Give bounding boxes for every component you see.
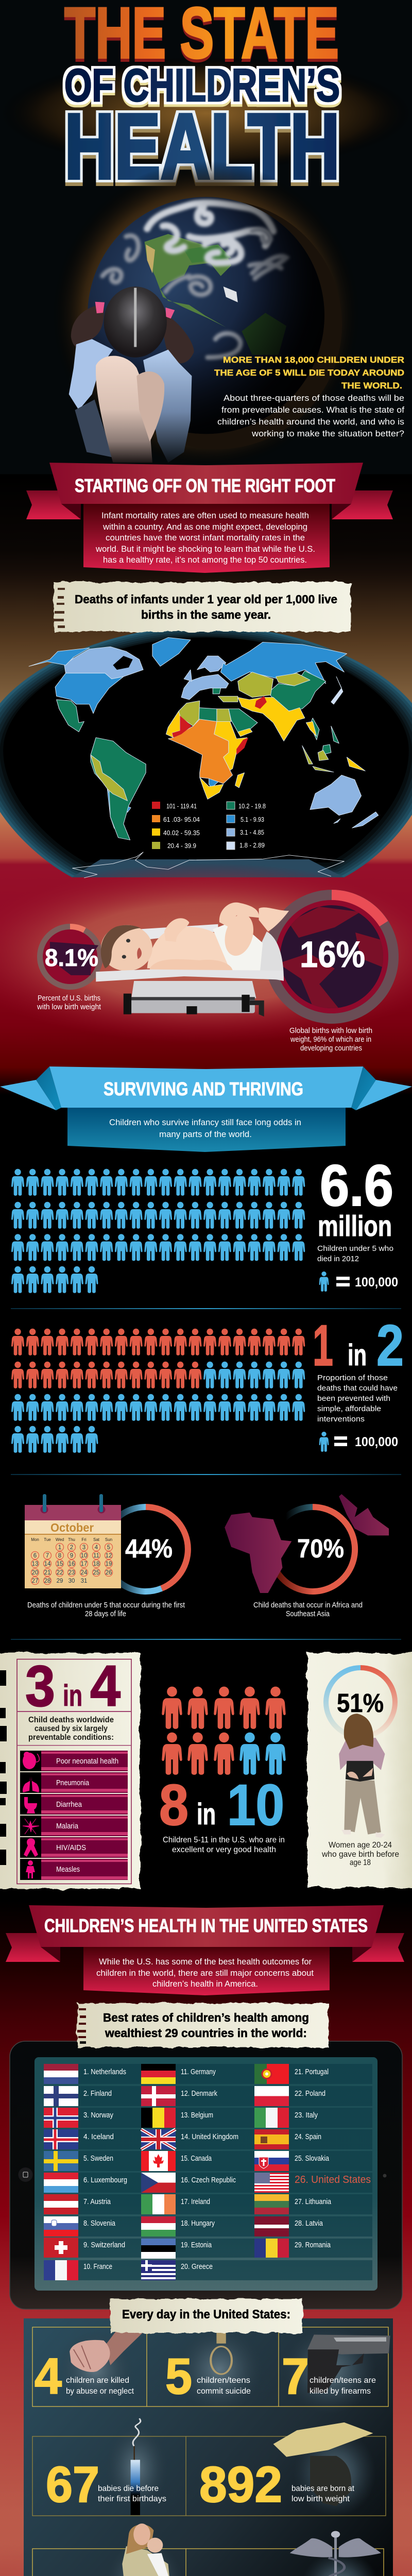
caption: Global births with low birth [289,1027,372,1035]
stat captions: commit suicide [197,2387,251,2396]
icon: calendar: 7 [46,1553,49,1559]
country names: column one: 3. Norway [83,2111,114,2120]
caption: Children 5-11 in the U.S. who are in [163,1836,285,1844]
intro box [83,1947,330,1995]
icon: calendar: 5 [107,1545,110,1551]
country names: column three [295,2068,371,2249]
caption [253,1601,363,1618]
torn paper [0,1653,140,1889]
icon: calendar: 27 [32,1578,38,1584]
illustration: baby on scale [96,903,289,1016]
stat captions: low birth weight [291,2495,350,2503]
intro box text: within a country. And as one might expect, developing [102,522,307,532]
sleeve [69,339,113,410]
caption: with low birth weight [37,1003,101,1011]
country names: column one: 7. Austria [83,2198,111,2206]
icon: calendar: 20 [32,1570,38,1576]
intro text [109,1117,301,1139]
antarctica band [72,859,344,877]
cause icons [23,1752,39,1878]
caption: Child deaths that occur in Africa and [253,1601,363,1609]
panel: every day in the united states [24,2318,393,2576]
stat captions: by abuse or neglect [66,2387,134,2396]
icon: teen mother with baby [122,2523,171,2576]
intro box text: world. But it might be shocking to learn that while the U.S. [95,544,315,554]
wings [0,1080,412,1110]
intro text: children’s health in America. [152,1979,258,1989]
intro text: While the U.S. has some of the best health outcomes for [99,1957,312,1967]
head [104,286,167,358]
callout text: Deaths of infants under 1 year old per 1,000 live [75,592,337,606]
caption: deaths that could have [317,1384,398,1393]
row strips [44,2064,372,2280]
big numbers: 67 [46,2456,99,2513]
country names: column one: 2. Finland [83,2090,112,2098]
value [313,1313,404,1378]
baby head [101,925,152,971]
cause labels: Poor neonatal health [56,1757,118,1766]
icon: calendar: Thu [68,1537,75,1542]
intro text [214,355,404,438]
caption: Children under 5 who [317,1244,393,1253]
big numbers: 5 [165,2348,192,2404]
caption [27,1601,185,1618]
heading text: caused by six largely [35,1724,108,1733]
callout text [75,592,337,621]
caption [317,1244,393,1263]
cause labels: Measles [56,1865,80,1874]
icon: calendar: Sat [93,1537,100,1542]
value [25,1654,121,1718]
icon: extinguished candle [131,2418,141,2515]
stat captions: children/teens are [310,2376,376,2385]
legs [96,356,152,463]
yellow headline: THE AGE OF 5 WILL DIE TODAY AROUND [214,368,404,378]
binder holes [54,588,65,628]
dress [143,350,192,463]
stat captions [66,2376,376,2576]
stat captions: their first birthdays [98,2495,166,2503]
country names: column three: 28. Latvia [295,2219,323,2228]
stat captions: killed by firearms [310,2387,371,2396]
intro box text: has a healthy rate, it’s not among the top 50 countries. [103,555,307,565]
caption: who gave birth before [321,1850,399,1859]
stat captions: babies are born at [291,2484,355,2493]
icon: calendar: 25 [93,1570,99,1576]
icon: calendar: 4 [95,1545,98,1551]
callout paper: best rates [77,2003,329,2047]
bows [95,302,175,318]
tablet: country rankings [10,2041,402,2309]
key [319,1432,398,1452]
banner heading: STARTING OFF ON THE RIGHT FOOT [75,475,335,496]
icon spotlights [71,2341,373,2576]
cause labels [56,1757,118,1874]
ring [270,895,393,1019]
yellow headline: THE WORLD. [341,381,402,391]
screen [35,2057,377,2291]
value: 4 [90,1654,121,1718]
stat: 70 percent africa and asia [225,1494,389,1618]
cause labels: Diarrhea [56,1800,82,1809]
icon: calendar: 30 [68,1578,75,1584]
country names: column one: 8. Slovenia [83,2219,116,2228]
country names: column two: 14. United Kingdom [181,2133,238,2141]
icon: calendar: 29 [57,1578,63,1584]
country names: column two [181,2068,238,2271]
icon: baby scale [273,2422,373,2506]
icon: calendar: 22 [57,1570,63,1576]
map legend: 1.8 - 2.89 [239,841,265,849]
icon: calendar: 3 [82,1545,85,1551]
US silhouette [50,942,98,975]
stat: 44 percent first 28 days [25,1494,188,1618]
paragraph: working to make the situation better? [251,429,404,438]
scale base [131,981,256,998]
value: 1 [313,1313,333,1378]
icon: calendar: 9 [70,1553,73,1559]
country names: column two: 15. Canada [181,2155,212,2163]
section banner: surviving and thriving [0,1066,412,1152]
value: 6.6 [320,1153,393,1218]
intro box text: Infant mortality rates are often used to measure health [101,511,309,520]
caption [163,1836,285,1854]
icon: calendar: Sun [105,1537,112,1542]
globe frame [0,626,412,877]
caption: died in 2012 [317,1255,359,1263]
icon: calendar: October [50,1521,94,1534]
value: 70% [297,1534,344,1563]
key: 100,000 [355,1275,398,1290]
value: 51% [337,1688,384,1718]
caption: Southeast Asia [286,1609,330,1618]
yellow headline [214,355,404,391]
cause labels: HIV/AIDS [56,1843,86,1852]
caption: Proportion of those [317,1374,388,1382]
country names: column three: 24. Spain [295,2133,321,2141]
icon: calendar: 23 [68,1570,75,1576]
intro box [67,1108,346,1152]
torn paper [307,1653,412,1888]
value: 8 [159,1773,188,1837]
callout text: Best rates of children’s health among [103,2011,309,2024]
icon: calendar: 13 [32,1561,38,1567]
icon: calendar: 6 [33,1553,37,1559]
caption: age 18 [350,1858,371,1867]
ribbon tails [6,1933,404,1962]
curled page [24,2318,393,2576]
country names: column two: 16. Czech Republic [181,2176,236,2184]
donut [104,1507,188,1591]
caption [289,1027,372,1053]
icon: calendar: 26 [106,1570,112,1576]
intro box text [95,511,315,565]
caption [317,1374,398,1423]
people [162,1687,286,1775]
intro box text: countries have the worst infant mortality rates in the [106,533,305,543]
intro text: Children who survive infancy still face long odds in [109,1117,301,1127]
big numbers: 7 [282,2348,309,2404]
caption: Deaths of children under 5 that occur during the first [27,1601,185,1609]
caption: excellent or very good health [172,1845,276,1854]
icon: calendar: 14 [44,1561,51,1567]
country names: column one [83,2068,127,2271]
paragraph: children’s health around the world, and who is [217,417,404,427]
pigtails [71,305,194,363]
donut [272,1507,355,1591]
country names: column one: 10. France [83,2263,112,2271]
country names: column three: 26. United States [295,2174,371,2185]
country names: column one: 9. Switzerland [83,2241,125,2249]
stat captions: children are killed [66,2376,129,2385]
value [159,1773,284,1837]
callout paper: deaths of infants [54,582,351,632]
paragraph [217,393,404,438]
countries [29,637,379,878]
country names: column three: 22. Poland [295,2090,325,2098]
icon: calendar: 19 [106,1561,112,1567]
icon: calendar: 28 [44,1578,50,1584]
caption: Percent of U.S. births [38,994,100,1003]
icon: calendar: 12 [106,1553,112,1559]
binder holes [0,1670,7,1865]
earth glow [52,161,360,470]
country names: column three: 21. Portugal [295,2068,329,2076]
cause bars [20,1751,128,1880]
country names: column one: 6. Luxembourg [83,2176,127,2184]
icon: calendar: 15 [57,1561,63,1567]
world map: infant mortality [0,626,412,878]
map legend: 10.2 - 19.8 [238,802,266,810]
panel: 51 percent teen mothers [307,1653,412,1888]
icon: calendar: 18 [93,1561,99,1567]
icon: calendar: Mon [31,1537,39,1542]
icon: calendar: 2 [70,1545,73,1551]
icon: calendar: Tue [44,1537,51,1542]
caption [37,994,101,1011]
icon: caduceus [290,2531,381,2576]
tray [139,924,218,940]
callout paper: every day [110,2299,303,2333]
icon: africa and southeast asia [225,1494,389,1593]
value: in [348,1338,367,1372]
yellow headline: MORE THAN 18,000 CHILDREN UNDER [223,355,404,365]
country names: column one: 5. Sweden [83,2155,113,2163]
icon: calendar: 31 [81,1578,87,1584]
flags: column three [254,2064,289,2258]
stat: 6.6 million [317,1153,398,1292]
cause labels: Pneumonia [56,1778,90,1787]
intro box [83,504,330,573]
map legend [152,802,266,850]
icon: calendar: 1 [58,1545,61,1551]
icon: noose [211,2330,232,2374]
big numbers: 4 [35,2348,62,2404]
value: 10 [227,1773,284,1837]
country names: column three: 25. Slovakia [295,2155,330,2163]
value: 8.1% [45,944,98,971]
caption: developing countries [300,1044,362,1053]
tablet body [10,2041,402,2309]
icon: calendar [25,1494,121,1588]
map legend: 5.1 - 9.93 [241,816,264,823]
icon: fist [70,2330,146,2372]
map legend: 20.4 - 39.9 [167,842,196,850]
stat captions: children/teens [197,2376,250,2385]
country names: column two: 18. Hungary [181,2219,215,2228]
value: in [63,1679,82,1713]
map legend: 61 .03- 95.04 [163,816,200,823]
illustration: sad girl [69,286,194,463]
icon: calendar: 8 [58,1553,61,1559]
caption: interventions [317,1415,365,1423]
country names: column three: 29. Romania [295,2241,331,2249]
caption: Women age 20-24 [329,1841,392,1850]
paragraph: About three-quarters of those deaths will be [224,393,404,403]
stat: 16 percent global low birth weight [270,895,393,1053]
intro text: children in the world, there are still major concerns about [96,1968,314,1978]
title [64,0,340,198]
stat: 8 in 10 healthy children [159,1687,286,1854]
icon: calendar: Wed [56,1537,64,1542]
ring [40,927,100,987]
flags: column one [44,2064,78,2280]
heading text: preventable conditions: [28,1733,114,1742]
icon: calendar: 16 [68,1561,75,1567]
country names: column three: 27. Lithuania [295,2198,332,2206]
heading text [28,1716,114,1742]
ribbon tails [26,490,393,519]
intro text [96,1957,314,1989]
section banner: children's health in the united states [6,1905,404,1995]
value: in [197,1798,216,1831]
country names: column one: 4. Iceland [83,2133,114,2141]
donut [326,1668,395,1737]
caption: 28 days of life [85,1609,126,1618]
callout text: births in the same year. [141,608,271,621]
cause labels: Malaria [56,1822,79,1831]
icon: calendar: 24 [81,1570,88,1576]
map legend: 40.02 - 59.35 [163,829,200,837]
ribbon band [49,463,363,504]
banner heading: SURVIVING AND THRIVING [104,1078,303,1099]
country names: column two: 20. Greece [181,2263,213,2271]
callout paper: every day: Every day in the United States: [122,2308,290,2321]
big numbers: 892 [199,2456,282,2513]
icon: earth globe [88,197,324,434]
gold box frames [32,2327,388,2576]
antarctica outline [72,852,344,878]
caption: been prevented with [317,1394,390,1403]
country names: column one: 1. Netherlands [83,2068,126,2076]
value: 3 [25,1654,55,1718]
key [319,1272,398,1292]
tray plate [96,970,283,981]
icon: calendar: Fri [81,1537,87,1542]
illustration: pregnant young woman [339,1714,385,1838]
icon: calendar: 17 [81,1561,87,1567]
country names: column two: 11. Germany [181,2068,216,2076]
country names: column two: 17. Ireland [181,2198,210,2206]
map legend: 3.1 - 4.85 [240,828,264,836]
value: 2 [376,1313,404,1378]
value: 16% [300,935,365,975]
pictogram: 6.6 million children [11,1169,305,1293]
intro text: many parts of the world. [159,1129,252,1139]
callout text [103,2011,309,2040]
band [49,1066,363,1108]
panel: 3 in 4 leading causes [0,1653,140,1889]
baby body [147,927,231,968]
country names: column three: 23. Italy [295,2111,318,2120]
stat: 1 in 2 [313,1313,404,1452]
tablet buttons [19,2167,386,2182]
caption [321,1841,399,1867]
icon: handgun [307,2335,390,2393]
paragraph: from preventable causes. What is the state of [221,405,404,415]
icon: calendar: 11 [93,1553,99,1559]
stat: 8.1 percent US low birth weight [37,927,101,1011]
map legend: 101 - 119.41 [166,802,197,810]
title glow [0,57,412,170]
callout text: wealthiest 29 countries in the world: [105,2026,307,2040]
section banner: starting off on the right foot [26,463,393,573]
globe silhouette [282,907,383,1008]
country names: column two: 19. Estonia [181,2241,212,2249]
country names: column two: 13. Belgium [181,2111,213,2120]
heading text: Child deaths worldwide [28,1716,114,1724]
flags: column two [141,2064,176,2280]
icon: calendar: 21 [44,1570,50,1576]
caption: simple, affordable [317,1404,381,1413]
country names: column two: 12. Denmark [181,2090,218,2098]
caption: weight, 96% of which are in [290,1036,371,1044]
stat captions: babies die before [98,2484,159,2493]
value: 44% [125,1534,173,1563]
pictogram: 1 in 2 preventable [11,1329,305,1453]
low birth weight glow [0,863,412,1043]
earth halo [93,200,342,449]
ribbon band [29,1905,384,1947]
icon: calendar: 10 [81,1553,87,1559]
unit: million [318,1210,392,1243]
big numbers [35,2348,309,2576]
title line: of children's: OF CHILDREN’S [64,59,340,111]
key: 100,000 [355,1435,398,1449]
